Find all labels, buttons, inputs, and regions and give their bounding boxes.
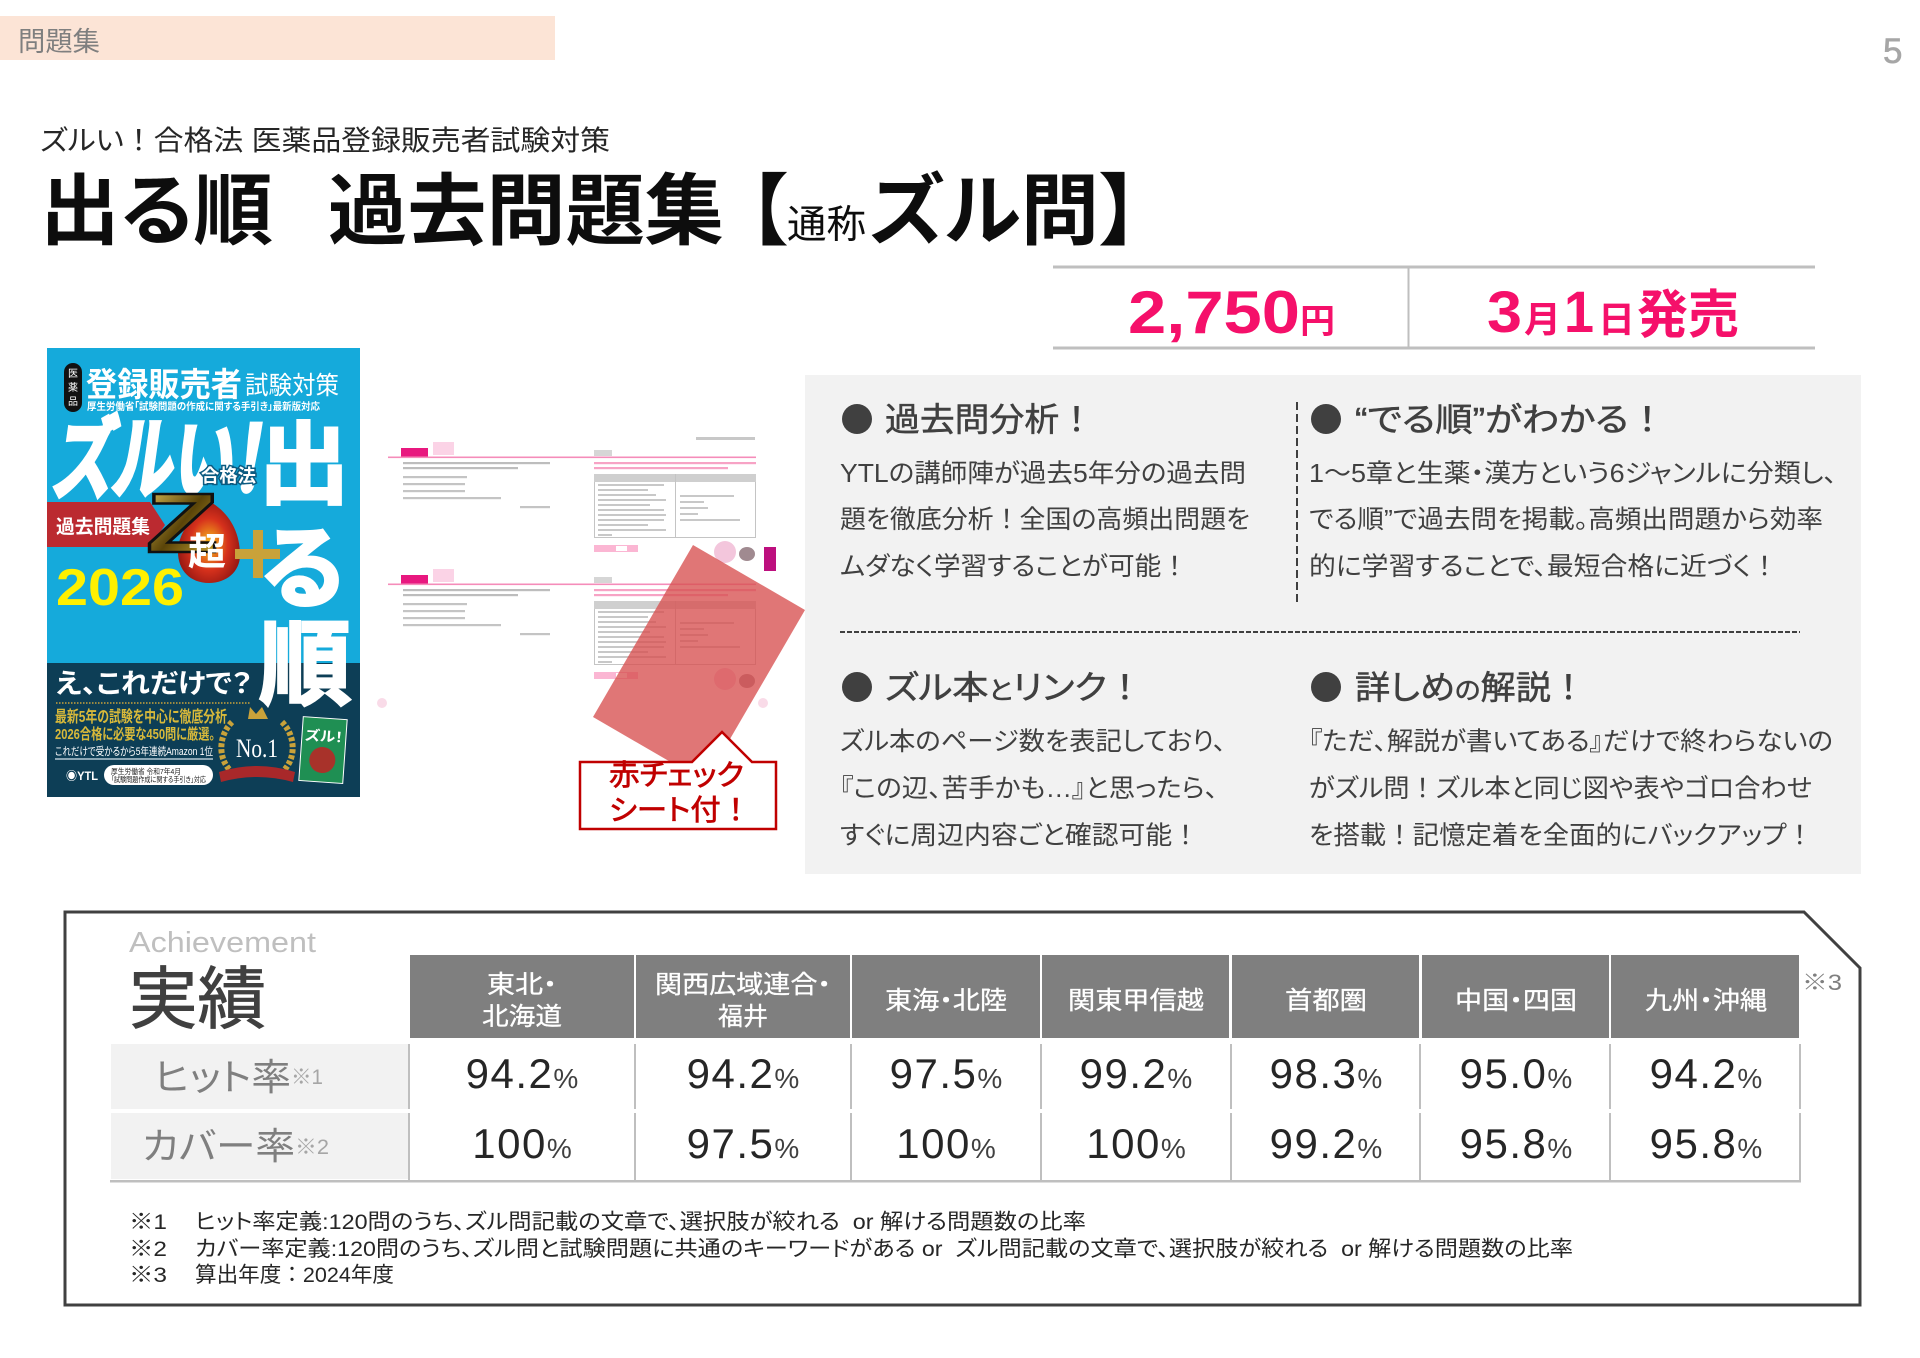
cover header [64, 363, 339, 413]
price: 円 [1300, 303, 1335, 341]
feature: detailed explanation [1309, 669, 1833, 850]
release date: 1 [1564, 280, 1594, 345]
cover copy: え、これだけで？ [56, 669, 252, 699]
table header: 東海・北陸 [885, 987, 1007, 1015]
feature: frequency order: 1～5章と生薬・漢方という6ジャンルに分類し、 [1309, 460, 1837, 488]
release date: 3 [1487, 280, 1522, 345]
cover header: 医 [68, 368, 78, 380]
price and release date box [1053, 266, 1815, 350]
feature: past exam analysis: YTLの講師陣が過去5年分の過去問 [840, 460, 1246, 488]
feature: frequency order: でる順”で過去問を掲載。高頻出問題から効率 [1309, 506, 1823, 534]
release date: 月 [1524, 299, 1561, 340]
table header: 首都圏 [1285, 987, 1367, 1015]
subtitle: ズルい！合格法 医薬品登録販売者試験対策 [40, 125, 610, 156]
feature: frequency order [1309, 401, 1837, 581]
feature: detailed explanation: 『ただ、解説が書いてある』だけで終わらないの [1309, 728, 1833, 756]
title: 通称 [787, 204, 866, 247]
price: 2,750 [1128, 279, 1300, 346]
table header: 北海道 [482, 1003, 562, 1031]
feature: detailed explanation: がズル問！ズル本と同じ図や表やゴロ合わせ [1309, 775, 1812, 803]
hit rate values: 97.5% [890, 1050, 1002, 1097]
footnotes: 算出年度：2024年度 [195, 1263, 394, 1287]
cover title: 順 [259, 615, 351, 717]
book cover [47, 348, 360, 797]
cover rate values: 100% [472, 1120, 572, 1167]
cover title: ズルい！ [49, 410, 273, 511]
release date [1487, 280, 1739, 345]
row label: cover rate [111, 1113, 408, 1179]
cover title [49, 410, 351, 717]
table header: 東北・ [487, 971, 557, 999]
feature: past exam analysis: 題を徹底分析！全国の高頻出問題を [840, 506, 1250, 534]
hit rate values: 98.3% [1270, 1050, 1382, 1097]
table header: 福井 [718, 1003, 768, 1031]
cover copy: 厚生労働省 令和7年4月 [111, 766, 181, 776]
title: ズル問 [869, 167, 1099, 255]
cover rate values: 97.5% [687, 1120, 799, 1167]
cover mini book [299, 717, 347, 784]
cover banner [47, 502, 165, 547]
feature: link with textbook [840, 669, 1226, 850]
title [40, 167, 1176, 255]
table header: 九州・沖縄 [1645, 987, 1767, 1015]
cover banner: 過去問題集 [56, 516, 150, 538]
cover rate values: 100% [1086, 1120, 1186, 1167]
footnotes [129, 1210, 1573, 1287]
feature: link with textbook: ズル本 とリンク！ [885, 669, 1143, 706]
running head [696, 437, 755, 440]
feature: past exam analysis: ムダなく学習することが可能 ！ [840, 553, 1188, 581]
cover header: 試験対策 [245, 372, 339, 400]
feature: link with textbook: 『この辺、苦手かも…』と思ったら、 [840, 775, 1218, 803]
title: 過去問題集 [328, 167, 724, 255]
footnotes: ※2 [129, 1237, 167, 1261]
cover emblem [146, 476, 280, 583]
cover copy: ◉YTL [66, 769, 98, 783]
table header [410, 955, 1799, 1038]
row label: hit rate: ヒット率 [154, 1057, 291, 1098]
achievement heading: 実績 [129, 962, 266, 1038]
feature: detailed explanation: 詳しめの解説！ [1355, 669, 1586, 706]
title: 】 [1098, 167, 1176, 255]
footnotes: ヒット率定義:120問のうち、ズル問記載の文章で、選択肢が絞れる or 解ける問題数の比率 [195, 1210, 1086, 1234]
feature: link with textbook: ズル本のページ数を表記しており、 [840, 728, 1226, 756]
feature: frequency order: 的に学習することで、最短合格に近づく ！ [1309, 553, 1778, 581]
chapter tab [764, 547, 776, 571]
callout [580, 732, 776, 829]
panel: features [805, 375, 1861, 874]
table header: 関東甲信越 [1068, 987, 1204, 1015]
cover title: る [261, 520, 344, 620]
cover copy: 「試験問題作成に関する手引き」対応 [111, 774, 206, 784]
cover rate values: 100% [896, 1120, 996, 1167]
feature: link with textbook: すぐに周辺内容ごと確認可能 ！ [840, 822, 1199, 850]
question block 2 [388, 569, 756, 690]
cover emblem: Z [146, 476, 218, 570]
cover header: 厚生労働省「試験問題の作成に関する手引き」最新版対応 [87, 400, 320, 413]
cover copy [55, 669, 252, 785]
cover rate values: 95.8% [1460, 1120, 1572, 1167]
cover emblem: 超 [188, 532, 226, 574]
cover rate values: 99.2% [1270, 1120, 1382, 1167]
cover copy: 最新5年の試験を中心に徹底分析 [55, 707, 227, 726]
title: 出る順 [40, 167, 273, 255]
footnotes: ※3 [129, 1263, 167, 1287]
table header: 中国・四国 [1455, 987, 1577, 1015]
feature: past exam analysis: 過去問分析 ！ [885, 401, 1094, 438]
footnotes: カバー率定義:120問のうち、ズル問と試験問題に共通のキーワードがある or ズル問記載の文章で、選択肢が絞れる or 解ける問題数の比率 [195, 1237, 1573, 1261]
cover rate values [472, 1120, 1762, 1167]
feature: frequency order: “でる順”がわかる ！ [1355, 401, 1666, 438]
cover title: 出 [259, 416, 349, 516]
cover copy: 2026合格に必要な450問に厳選。 [55, 725, 215, 743]
feature: past exam analysis [840, 401, 1250, 581]
row label: cover rate: カバー率 [142, 1126, 295, 1167]
hit rate values: 99.2% [1080, 1050, 1192, 1097]
cover year: 2026 [56, 559, 184, 617]
achievement label: Achievement [129, 927, 316, 959]
section tag [0, 16, 555, 60]
hit rate values [466, 1050, 1762, 1097]
hit rate values: 94.2% [687, 1050, 799, 1097]
hit rate values: 94.2% [466, 1050, 578, 1097]
title: 【 [711, 167, 789, 255]
row label: cover rate: ※2 [295, 1136, 329, 1159]
cover header: 登録販売者 [86, 366, 242, 403]
release date: 日 [1598, 299, 1635, 340]
cover header: 品 [68, 396, 78, 408]
page number: 5 [1883, 32, 1902, 71]
cover award: No.1 [236, 734, 278, 763]
cover award [219, 707, 295, 782]
panel: achievement [65, 912, 1860, 1305]
cover mini book: ズル！ [304, 727, 343, 745]
row label: hit rate: ※1 [291, 1066, 323, 1089]
sample pages [377, 437, 776, 708]
table header: 関西広域連合・ [655, 971, 831, 999]
footnotes: ※1 [129, 1210, 167, 1234]
cover rate values: 95.8% [1650, 1120, 1762, 1167]
callout: 赤チェック [609, 760, 744, 792]
release date: 発売 [1637, 287, 1739, 345]
red check sheet [593, 545, 805, 782]
question block 1 [388, 442, 756, 563]
feature: detailed explanation: を搭載！記憶定着を全面的にバックアップ ！ [1309, 822, 1813, 850]
page numbers [377, 698, 768, 708]
hit rate values: 94.2% [1650, 1050, 1762, 1097]
section tag: 問題集 [18, 27, 100, 57]
cover title: 合格法 [201, 466, 256, 486]
row label: hit rate [111, 1044, 408, 1109]
hit rate values: 95.0% [1460, 1050, 1572, 1097]
cover header: 薬 [68, 382, 78, 394]
callout: シート付！ [609, 794, 751, 827]
note marker: ※3 [1802, 970, 1842, 995]
cover copy: これだけで受かるから5年連続Amazon 1位 [55, 744, 213, 758]
